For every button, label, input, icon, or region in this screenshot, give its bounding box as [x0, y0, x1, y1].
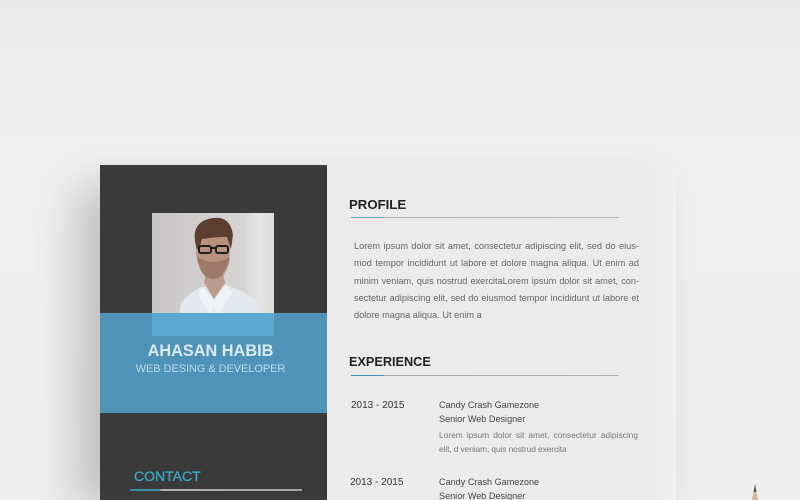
profile heading: PROFILE	[349, 197, 406, 212]
sheet shadow	[100, 172, 676, 492]
company and role: Candy Crash Gamezone	[439, 400, 539, 410]
job title: WEB DESING & DEVELOPER	[136, 363, 285, 375]
profile underline	[351, 217, 619, 218]
photo of man	[152, 213, 274, 313]
description	[439, 430, 638, 454]
profile text: Lorem ipsum dolor sit amet, consectetur adipiscing elit, sed do eius-	[354, 241, 639, 251]
company and role	[439, 477, 539, 500]
contact heading: CONTACT	[134, 468, 201, 484]
resume sheet	[100, 165, 675, 500]
profile text	[354, 241, 639, 320]
contact underline	[130, 489, 302, 491]
dates: 2013 - 2015	[351, 400, 404, 411]
profile text: mod tempor incididunt ut labore et dolore magna aliqua. Ut enim ad	[354, 258, 639, 268]
experience entry 2	[350, 477, 539, 500]
panel: dark sidebar	[100, 165, 327, 500]
company and role: Candy Crash Gamezone	[439, 477, 539, 487]
experience underline	[351, 375, 619, 376]
experience heading: EXPERIENCE	[349, 355, 431, 369]
profile text: minim veniam, quis nostrud exercitaLorem ipsum dolor sit amet, con-	[354, 276, 639, 286]
company and role	[439, 400, 539, 424]
photo overlap tint	[152, 313, 274, 336]
name: AHASAN HABIB	[148, 342, 273, 360]
dates: 2013 - 2015	[350, 477, 403, 488]
icon: pencil tip	[752, 484, 758, 500]
company and role: Senior Web Designer	[439, 414, 525, 424]
experience entry 1	[351, 400, 638, 454]
blue name band	[100, 313, 327, 413]
profile text: sectetur adipiscing elit, sed do eiusmod tempor incididunt ut labore et	[354, 293, 639, 303]
description: Lorem ipsum dolor sit amet, consectetur adipiscing	[439, 430, 638, 440]
panel: right content background	[327, 165, 676, 500]
description: elit, d veniam, quis nostrud exercita	[439, 444, 567, 454]
profile text: dolore magna aliqua. Ut enim a	[354, 310, 482, 320]
